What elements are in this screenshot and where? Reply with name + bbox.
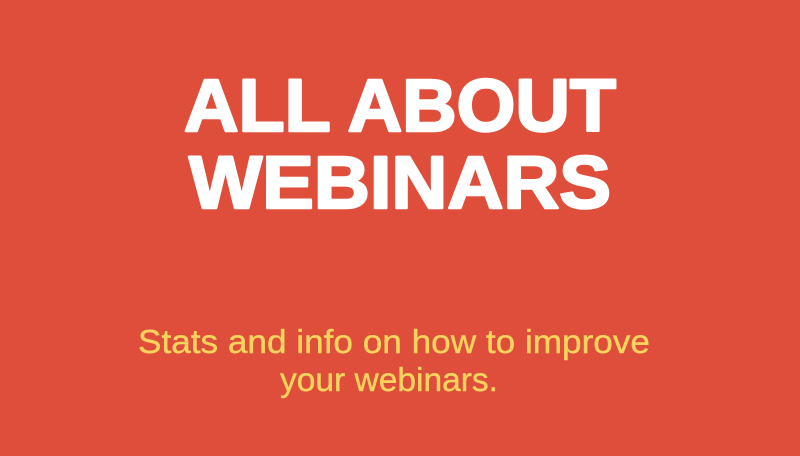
title [184, 64, 616, 224]
subtitle: your webinars. [280, 361, 498, 398]
title: ALL ABOUT [184, 64, 616, 147]
title: WEBINARS [189, 141, 611, 224]
subtitle: Stats and info on how to improve [138, 323, 650, 360]
subtitle [138, 323, 650, 398]
